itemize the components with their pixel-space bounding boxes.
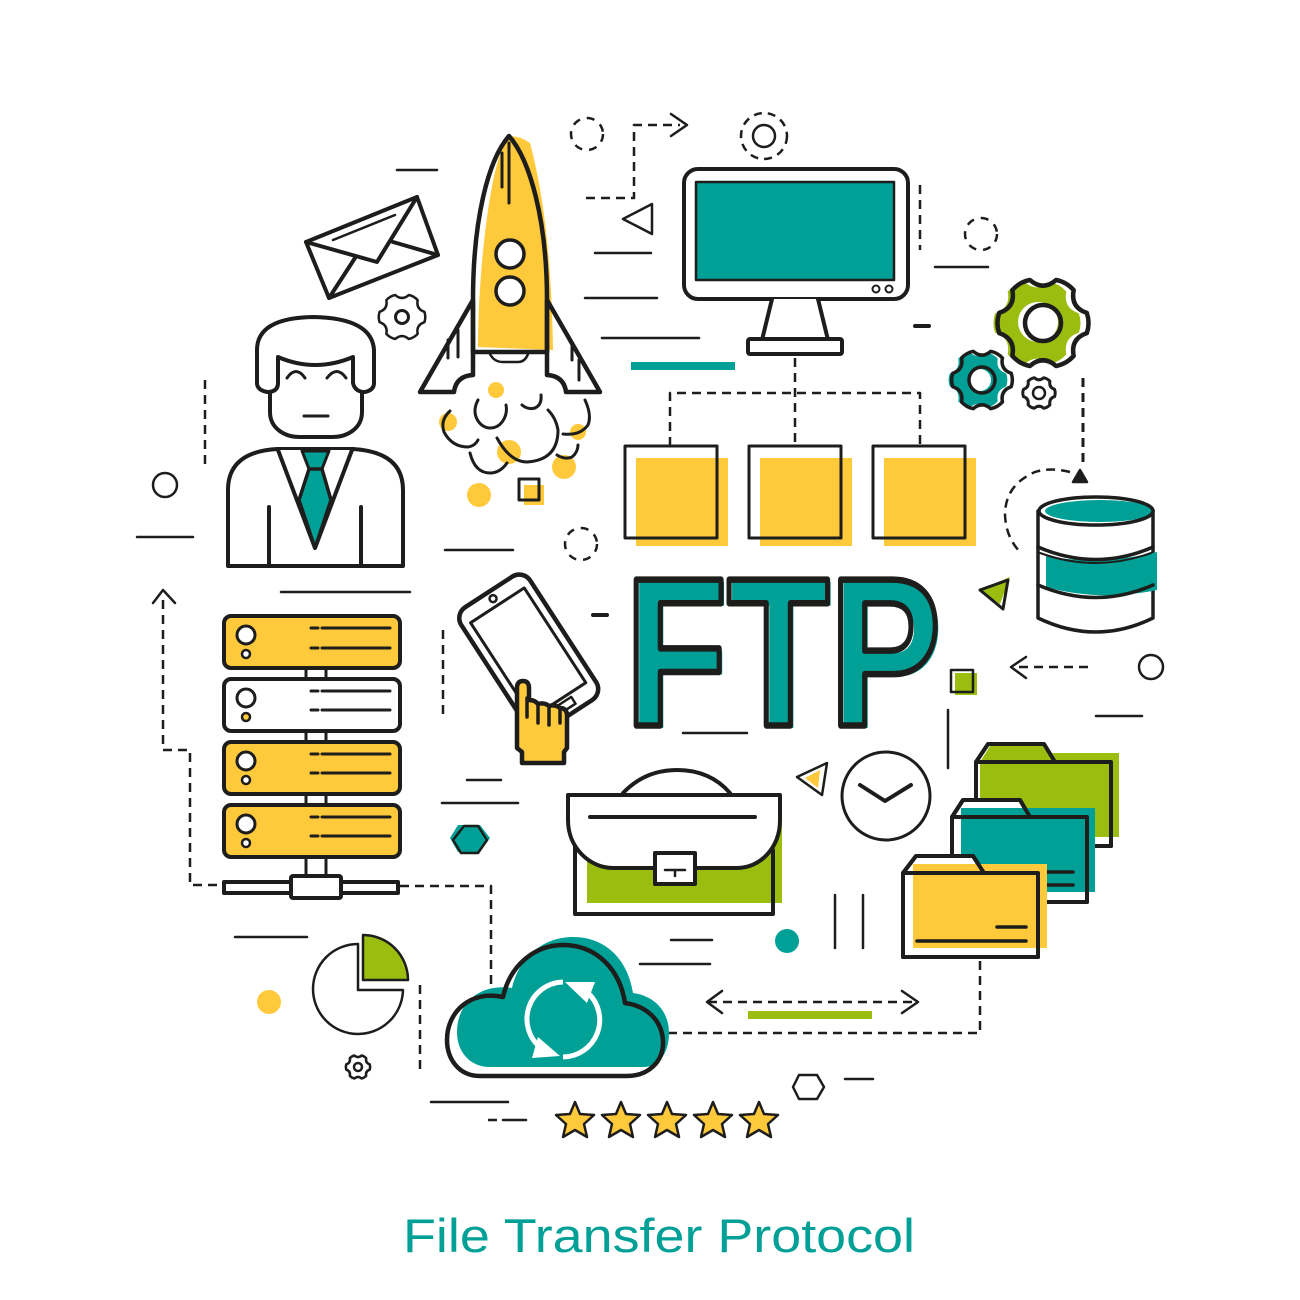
icon: five stars: [556, 1102, 778, 1137]
icon: cloud with sync arrows: [447, 937, 669, 1076]
icon: briefcase: [568, 770, 782, 914]
triangles and colored accents: [257, 577, 1010, 1019]
caption: File Transfer Protocol: [403, 1209, 915, 1262]
icon: small gear bottom: [346, 1056, 370, 1078]
icon: three yellow squares: [625, 446, 976, 546]
icon: clock: [842, 752, 930, 840]
arrowheads: [153, 114, 1087, 1013]
icon: small gear near envelope: [379, 295, 425, 339]
icon: person: [228, 317, 403, 566]
icon: gears: [949, 280, 1089, 409]
icon: monitor: [684, 169, 908, 354]
icon: rocket: [420, 136, 600, 392]
FTP lettering: FTP: [625, 534, 941, 770]
network connectors: [670, 358, 920, 446]
icon: small square: [519, 479, 544, 505]
teal bar: [631, 362, 735, 370]
FTP lettering: FTP: [628, 536, 944, 773]
decorative small shapes: [137, 113, 1163, 1120]
icon: rocket smoke: [439, 382, 589, 507]
icon: server rack: [224, 616, 400, 898]
icon: folders: [903, 744, 1119, 957]
dashed connectors and arrows: [163, 125, 1088, 1120]
icon: pie chart: [313, 935, 408, 1034]
icon: smartphone with hand: [454, 570, 603, 763]
icon: database: [1038, 497, 1157, 632]
icon: envelope: [306, 197, 438, 298]
